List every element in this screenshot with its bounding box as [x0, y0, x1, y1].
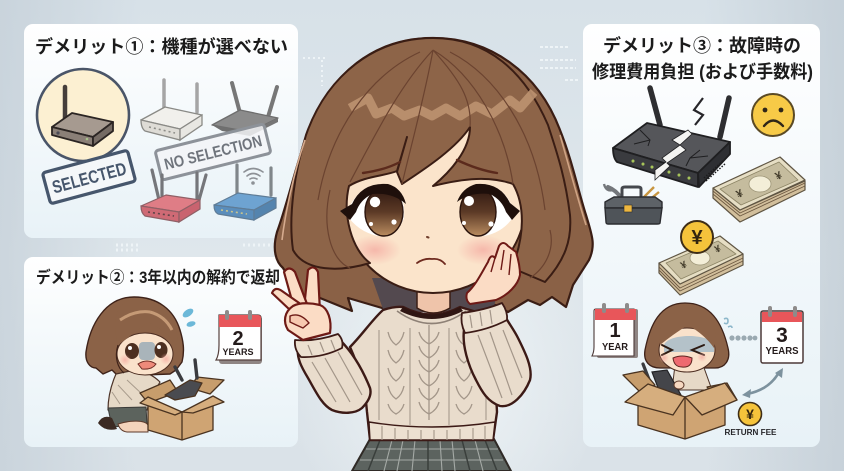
icon: spark: [694, 98, 703, 125]
stamp: selected: SELECTED: [50, 158, 129, 197]
icon: sweat drops: [181, 307, 196, 328]
heading: drawback 3: デメリット③：故障時の: [603, 35, 801, 56]
icon: calendar 1 year: YEAR: [602, 342, 629, 353]
icon: calendar 2 years: YEARS: [222, 347, 254, 358]
sweater body: [350, 307, 497, 440]
heading: drawback 3: [592, 35, 813, 82]
skirt: [352, 439, 511, 471]
icon: calendar 2 years: [216, 310, 262, 364]
icon: red router: [141, 170, 206, 222]
icon: V-sign hand: [272, 267, 331, 340]
right sleeve: [461, 303, 531, 406]
icon: calendar 3 years: 3: [776, 324, 788, 347]
cheek blush: [349, 235, 509, 265]
front hair: [282, 38, 586, 282]
neck: [417, 285, 450, 313]
illustration: chibi girl packing router: [86, 297, 183, 432]
icon: wifi: [244, 168, 263, 184]
shadow behind neck: [372, 278, 500, 312]
stamp: selected: [42, 150, 136, 204]
stamp: no selection: NO SELECTION: [163, 133, 264, 174]
icon: sweat marks: [724, 318, 732, 328]
icon: return fee coin: [738, 402, 762, 426]
icon: blue router: [214, 165, 276, 220]
heading: drawback 2: デメリット②：3年以内の解約で返却: [36, 267, 280, 287]
panel: drawback 3: [583, 24, 820, 447]
heading: drawback 3: 修理費用負担 (および手数料): [592, 61, 813, 82]
back hair: [275, 38, 593, 312]
icon: calendar 2 years: 2: [232, 328, 244, 350]
icon: calendar 1 year: [592, 303, 638, 358]
illustration: crying chibi in box: [643, 303, 729, 395]
icon: calendar 3 years: [761, 306, 803, 363]
panel: drawback 2: [24, 257, 298, 447]
icon: money stack small: ¥: [713, 243, 723, 256]
label: return fee: RETURN FEE: [724, 427, 777, 437]
icon: selected router in circle: [37, 69, 129, 161]
icon: yen coin: [681, 221, 713, 253]
icon: money stack small: ¥: [679, 259, 689, 272]
left eye: [340, 184, 406, 236]
stamp: no selection: [155, 124, 271, 180]
icon: money stack large: [713, 157, 805, 222]
right eye: [457, 184, 520, 236]
illustration: cardboard box: [623, 371, 737, 439]
icon: dark router: [212, 83, 278, 136]
heading: drawback 1: デメリット①：機種が選べない: [35, 36, 288, 57]
icon: calendar 3 years: YEARS: [766, 346, 799, 357]
eyebrows: [363, 160, 497, 173]
nose: [427, 236, 428, 238]
icon: money stack large: ¥: [734, 187, 746, 201]
panel: drawback 1: [24, 24, 298, 238]
icon: broken router: [613, 88, 730, 187]
icon: white router: [141, 80, 202, 140]
arrow: curved double arrow: [742, 368, 783, 398]
icon: return fee coin: ¥: [746, 406, 754, 422]
face: [343, 120, 526, 293]
central character: [272, 38, 593, 471]
left sleeve: [295, 334, 371, 413]
icon: dotted line: [729, 335, 757, 341]
mouth: [417, 259, 445, 264]
icon: money stack large: ¥: [773, 169, 785, 183]
icon: yen coin: ¥: [691, 227, 703, 249]
illustration: box with router: [140, 360, 224, 440]
icon: toolbox: [604, 184, 662, 224]
icon: hand on cheek: [466, 243, 520, 304]
icon: sad face: [752, 94, 794, 136]
icon: calendar 1 year: 1: [609, 320, 621, 342]
icon: money stack small: [659, 236, 743, 295]
